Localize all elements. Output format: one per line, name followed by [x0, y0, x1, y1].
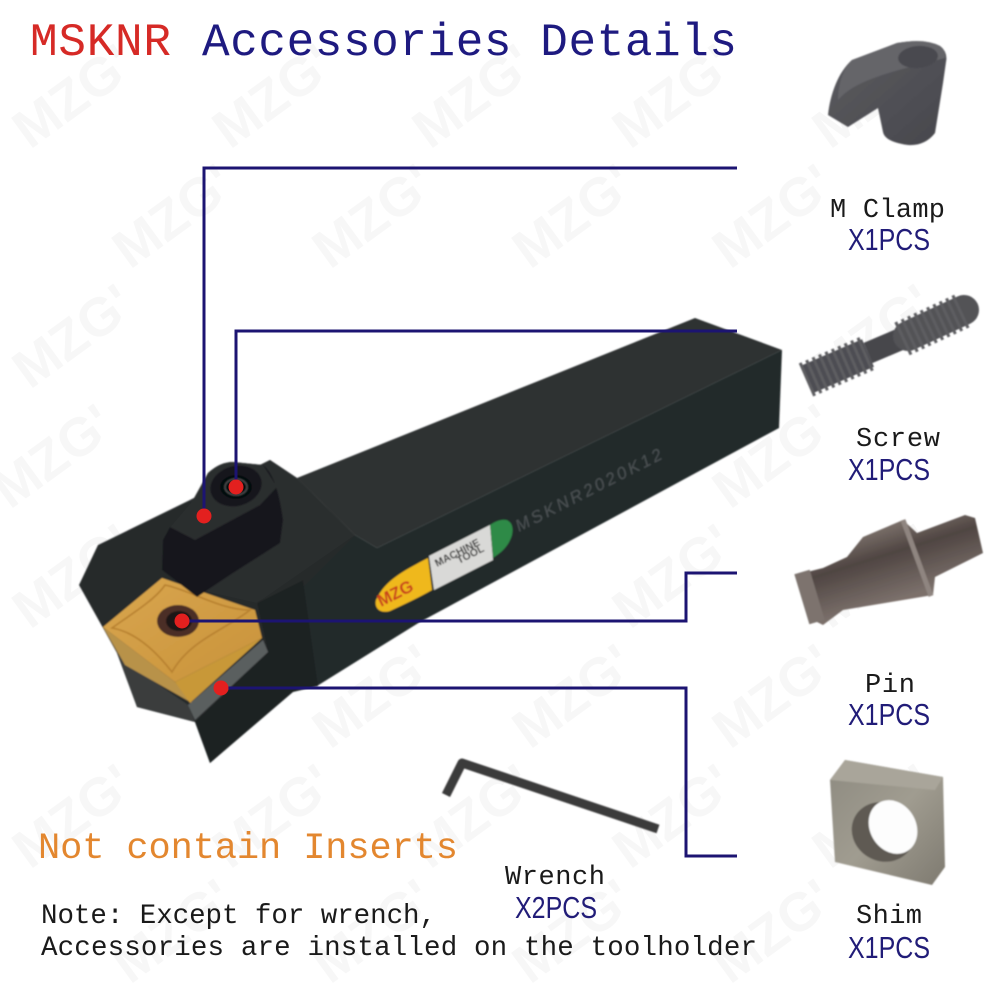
carbide insert — [103, 578, 262, 703]
icon: shim — [830, 760, 945, 885]
background watermark: MZG' — [702, 868, 845, 995]
part: pin: X1PCS — [848, 697, 930, 732]
note text: Accessories are installed on the toolholder — [41, 933, 757, 964]
background watermark: MZG' — [602, 753, 745, 880]
background watermark: MZG' — [2, 273, 145, 400]
background watermark: MZG' — [202, 753, 345, 880]
background watermark: MZG' — [802, 33, 945, 160]
shank top face — [297, 318, 782, 548]
title: Accessories Details — [202, 17, 737, 69]
insert top — [103, 578, 262, 682]
wrench label — [505, 863, 605, 925]
label: M Clamp — [830, 196, 945, 226]
part: pin — [795, 515, 983, 732]
leader lines — [182, 168, 737, 856]
insert side — [103, 627, 192, 703]
logo badge: TOOL — [455, 543, 487, 567]
logo badge — [374, 520, 513, 612]
background watermark: MZG' — [402, 753, 545, 880]
toolholder — [79, 318, 782, 763]
background watermark: MZG' — [802, 513, 945, 640]
background watermark: MZG' — [502, 868, 645, 995]
background watermark: MZG' — [302, 153, 445, 280]
icon: screw — [806, 310, 964, 380]
background watermark: MZG' — [702, 393, 845, 520]
background watermark: MZG' — [602, 33, 745, 160]
icon: wrench — [446, 763, 658, 829]
icon: pin — [795, 515, 983, 625]
clamp on tool — [162, 460, 283, 597]
head front face — [195, 580, 318, 763]
background watermark: MZG' — [702, 153, 845, 280]
title: MSKNR — [30, 17, 171, 69]
background watermark: MZG' — [602, 513, 745, 640]
part: M clamp — [828, 41, 946, 257]
background watermark: MZG' — [102, 868, 245, 995]
background watermark: MZG' — [302, 633, 445, 760]
part: screw: X1PCS — [848, 452, 930, 487]
background watermark: MZG' — [2, 753, 145, 880]
red marker dots — [174, 480, 244, 696]
note text — [41, 901, 757, 964]
part: screw — [806, 310, 964, 487]
background watermark: MZG' — [2, 33, 145, 160]
model marking: MSKNR2020K12 — [512, 445, 666, 536]
shank side face — [280, 350, 782, 690]
background watermark: MZG' — [802, 273, 945, 400]
label: Shim — [856, 902, 922, 932]
part: shim: X1PCS — [848, 930, 930, 965]
background watermark: MZG' — [302, 868, 445, 995]
logo badge: MZG — [374, 576, 416, 611]
shim seat — [188, 640, 268, 720]
background watermark: MZG' — [402, 33, 545, 160]
background watermark: MZG' — [102, 153, 245, 280]
note text: Note: Except for wrench, — [41, 901, 436, 932]
wrench label: X2PCS — [515, 890, 597, 925]
background watermark: MZG' — [702, 633, 845, 760]
icon: M clamp — [828, 41, 946, 145]
lower left face — [117, 653, 195, 722]
head body — [79, 460, 355, 763]
label: Pin — [865, 671, 915, 701]
logo badge: MACHINE — [433, 537, 482, 570]
background watermark: MZG' — [202, 33, 345, 160]
background watermark: MZG' — [502, 633, 645, 760]
part: shim — [830, 760, 945, 965]
wrench label: Wrench — [505, 863, 605, 893]
background watermark: MZG' — [2, 513, 145, 640]
label: Screw — [856, 425, 940, 455]
background watermark: MZG' — [802, 753, 945, 880]
part: M clamp: X1PCS — [848, 222, 930, 257]
insert hole — [157, 605, 199, 637]
background watermark: MZG' — [502, 153, 645, 280]
inserts notice: Not contain Inserts — [38, 828, 458, 870]
head top plate — [190, 460, 355, 603]
